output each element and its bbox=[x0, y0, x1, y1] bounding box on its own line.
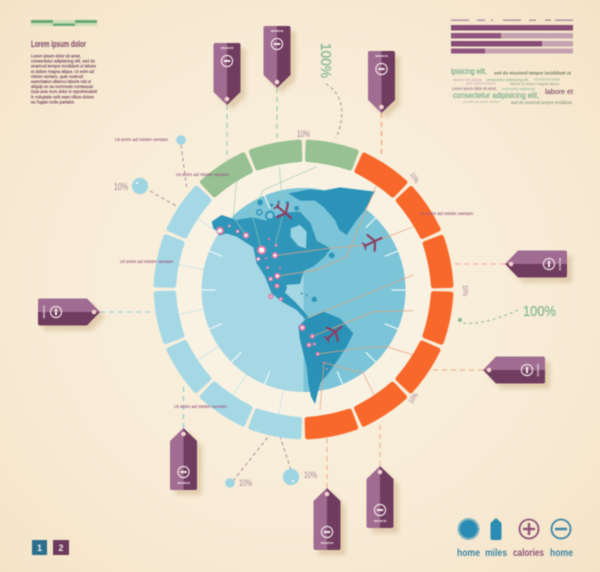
tag: left bbox=[38, 298, 100, 326]
legend labels: calories bbox=[513, 548, 544, 559]
small ring annotations bbox=[115, 137, 473, 410]
tag: right 1 bbox=[505, 250, 567, 278]
tag: left: MINIMUM bbox=[42, 305, 46, 318]
small ring annotations: Ut enim ad minim veniam bbox=[174, 404, 227, 410]
callout: 100% top bbox=[317, 43, 342, 138]
city markers bbox=[217, 225, 327, 370]
percentage labels: 10% bbox=[297, 129, 310, 139]
tag: top 3: MINIMUM bbox=[375, 54, 388, 58]
percentage labels: 10% bbox=[408, 392, 420, 405]
ring background bbox=[172, 158, 434, 420]
legend icon: miles tag bbox=[490, 518, 502, 540]
tag: bottom 1 bbox=[170, 428, 197, 490]
bubble callouts with dashed leaders bbox=[132, 135, 299, 488]
tag: bottom 1: MINIMUM bbox=[177, 481, 190, 485]
word cloud: laboris nisi aliquip bbox=[453, 78, 482, 82]
tag: bottom 2: MINIMUM bbox=[321, 541, 334, 545]
word cloud: quis nostrud exercit bbox=[466, 82, 495, 86]
tag: bottom 3 bbox=[366, 466, 394, 528]
ring: green segments bbox=[202, 133, 356, 201]
map: the Americas bbox=[212, 167, 413, 410]
callout: 100% top: 100% bbox=[317, 43, 334, 78]
spokes from globe to ring bbox=[178, 218, 284, 415]
word cloud: sed do eiusmod tempor incididunt bbox=[511, 100, 573, 105]
word cloud: sed do eiusmod tempor incididunt ut bbox=[494, 70, 571, 76]
word cloud: ipisicing elit, bbox=[451, 67, 487, 76]
map: Greenland and arctic land bbox=[288, 187, 375, 235]
top-left heading bar bbox=[31, 20, 97, 26]
percentage labels bbox=[114, 129, 468, 488]
icon: plane 1 bbox=[271, 199, 297, 225]
legend labels: miles bbox=[485, 548, 507, 559]
small ring annotations: Ut enim ad minim veniam bbox=[115, 137, 168, 143]
flight lines bbox=[275, 185, 413, 410]
pagination buttons: 1 bbox=[37, 543, 42, 553]
word cloud: Lorem ipsum dolor sit amet, bbox=[452, 86, 497, 91]
bar chart: top right bbox=[451, 20, 573, 54]
map: South America bbox=[298, 312, 353, 404]
text block: intro paragraph: consectetur adipisicing elit, sed do bbox=[31, 59, 95, 64]
small ring annotations: Ut enim ad minim veniam bbox=[120, 259, 173, 265]
word cloud: sed eiusmod tempor bbox=[534, 78, 561, 82]
text block: intro paragraph: Duis aute irure dolor in reprehenderit bbox=[31, 89, 98, 94]
word cloud: labore et bbox=[545, 87, 574, 96]
globe: darker northern zone bbox=[228, 188, 304, 222]
percentage labels: 10% bbox=[114, 182, 128, 193]
word cloud: consectetur adipisicing bbox=[502, 87, 535, 91]
tag: top 3 bbox=[368, 51, 395, 113]
word cloud bbox=[451, 67, 574, 105]
tag: top 1 bbox=[214, 43, 240, 105]
tag: top 2: MINIMUM bbox=[271, 29, 284, 33]
text block: intro paragraph: in voluptate velit esse cillum dolore bbox=[31, 94, 94, 99]
word cloud: labore et dolore magna aliqua bbox=[510, 81, 560, 86]
legend icon: calories plus bbox=[520, 520, 538, 538]
text block: intro paragraph: exercitation ullamco laboris nisi ut bbox=[31, 79, 92, 84]
heading: Lorem ipsum dolor: Lorem ipsum dolor bbox=[31, 39, 86, 49]
text block: intro paragraph: eiusmod tempor incididunt ut labore bbox=[31, 64, 96, 69]
tag: right 1: MINIMUM bbox=[558, 258, 562, 271]
percentage labels: 10% bbox=[408, 172, 420, 185]
map: Gulf of Mexico bbox=[286, 284, 300, 298]
small ring annotations: Ut enim ad minim veniam bbox=[176, 172, 229, 178]
legend icon: home minus bbox=[552, 520, 570, 538]
text block: intro paragraph: et dolore magna aliqua. Ut enim ad bbox=[31, 69, 94, 74]
tag: bottom 2 bbox=[314, 488, 340, 550]
word cloud: consectetur adipisicing elit, bbox=[453, 91, 539, 100]
tag: bottom 3: MINIMUM bbox=[374, 519, 387, 523]
callout: 100% right: 100% bbox=[523, 303, 556, 320]
pagination buttons bbox=[32, 540, 69, 555]
tag: right 2: MINIMUM bbox=[536, 364, 540, 377]
tag: right 2 bbox=[483, 356, 545, 384]
text block: intro paragraph: Lorem ipsum dolor sit amet, bbox=[31, 54, 81, 58]
legend labels bbox=[457, 548, 573, 559]
ring: blue segments bbox=[147, 184, 299, 437]
tag: top 2 bbox=[264, 26, 290, 88]
text block: intro paragraph: minim veniam, quis nostrud bbox=[31, 74, 83, 79]
text block: intro paragraph: eu fugiat nulla pariatur. bbox=[31, 99, 75, 104]
globe bbox=[200, 188, 406, 392]
percentage labels: 10% bbox=[461, 285, 468, 296]
word cloud: consectetur adipisicing elit, bbox=[486, 77, 529, 82]
icon: plane 3 bbox=[321, 320, 347, 346]
percentage labels: 10% bbox=[304, 470, 317, 480]
pagination buttons: 2 bbox=[58, 543, 64, 553]
icon: plane 2 bbox=[360, 230, 385, 254]
ring: orange segments bbox=[301, 155, 460, 446]
small ring annotations: Ut enim ad minim veniam bbox=[420, 211, 473, 217]
map: North America bbox=[212, 212, 331, 320]
legend icon: home sun bbox=[458, 519, 478, 539]
text block: intro paragraph: aliquip ex ea commodo consequat. bbox=[31, 84, 94, 89]
text block: intro paragraph bbox=[31, 54, 98, 104]
tag: top 1: MINIMUM bbox=[221, 46, 234, 50]
callout: 100% right bbox=[458, 303, 556, 323]
map: Hudson Bay bbox=[291, 225, 307, 248]
word cloud: ut enim ad minim veniam bbox=[463, 100, 500, 104]
percentage labels: 10% bbox=[239, 478, 252, 488]
legend labels: home bbox=[457, 548, 480, 559]
legend labels: home bbox=[550, 548, 573, 559]
map: arctic islands bbox=[256, 199, 335, 302]
dashed connectors from tags to ring bbox=[100, 88, 505, 488]
